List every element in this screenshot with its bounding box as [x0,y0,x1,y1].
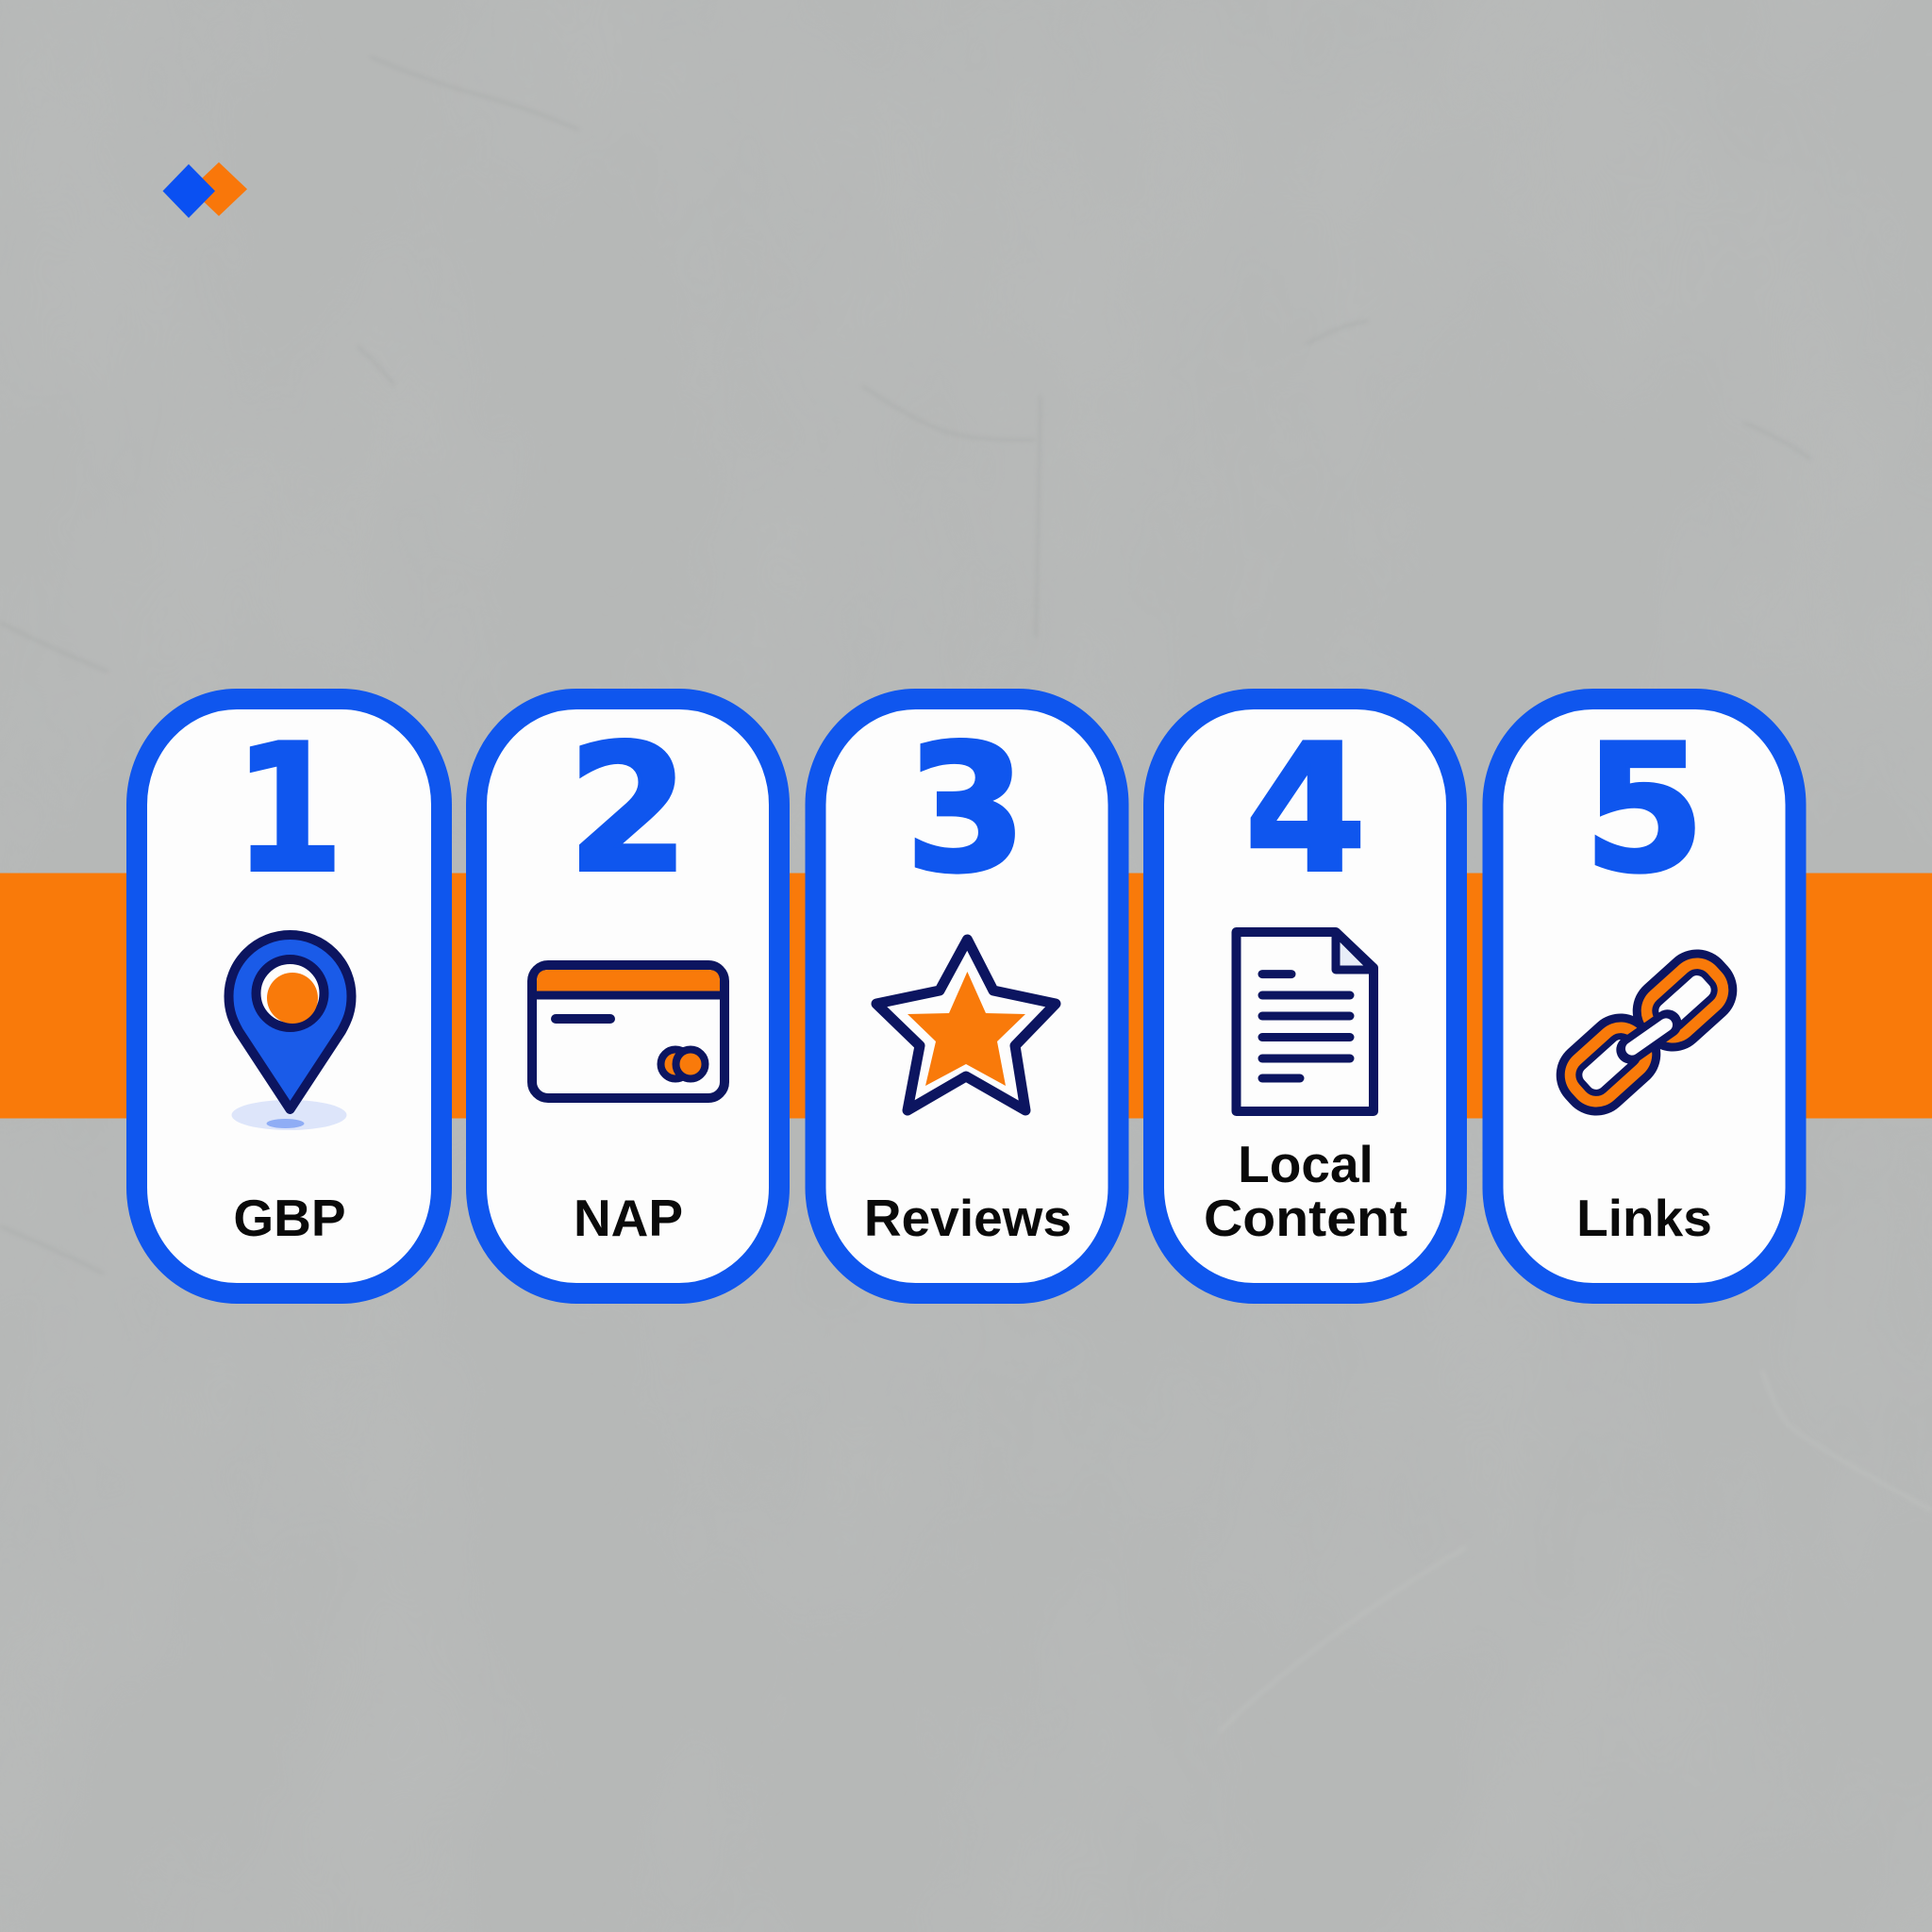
label: Links: Links [1576,1189,1712,1247]
icon: map pin [228,935,351,1130]
icon: star [876,940,1056,1110]
orange horizontal band [0,874,1932,1119]
label: GBP: GBP [233,1189,346,1247]
card 2: NAP [476,699,779,1293]
label: NAP: NAP [574,1189,683,1247]
icon: chain link [1541,935,1752,1130]
card 4: Local Content [1154,699,1457,1293]
card 1: GBP [137,699,441,1293]
label: Reviews: Reviews [864,1189,1072,1247]
number 3: 3 [905,707,1027,911]
number 2: 2 [567,707,690,911]
logo mark: overlapping diamonds [162,162,247,218]
icon: payment card [532,965,724,1098]
number 5: 5 [1583,707,1706,911]
card 5: Links [1492,699,1796,1293]
label: Local Content: Local [1238,1135,1374,1193]
card 3: Reviews [815,699,1119,1293]
number 4: 4 [1244,707,1367,911]
label: Local Content: Content [1204,1189,1407,1247]
number 1: 1 [234,708,343,911]
label: Local Content [1204,1135,1407,1247]
icon: document [1236,932,1374,1111]
